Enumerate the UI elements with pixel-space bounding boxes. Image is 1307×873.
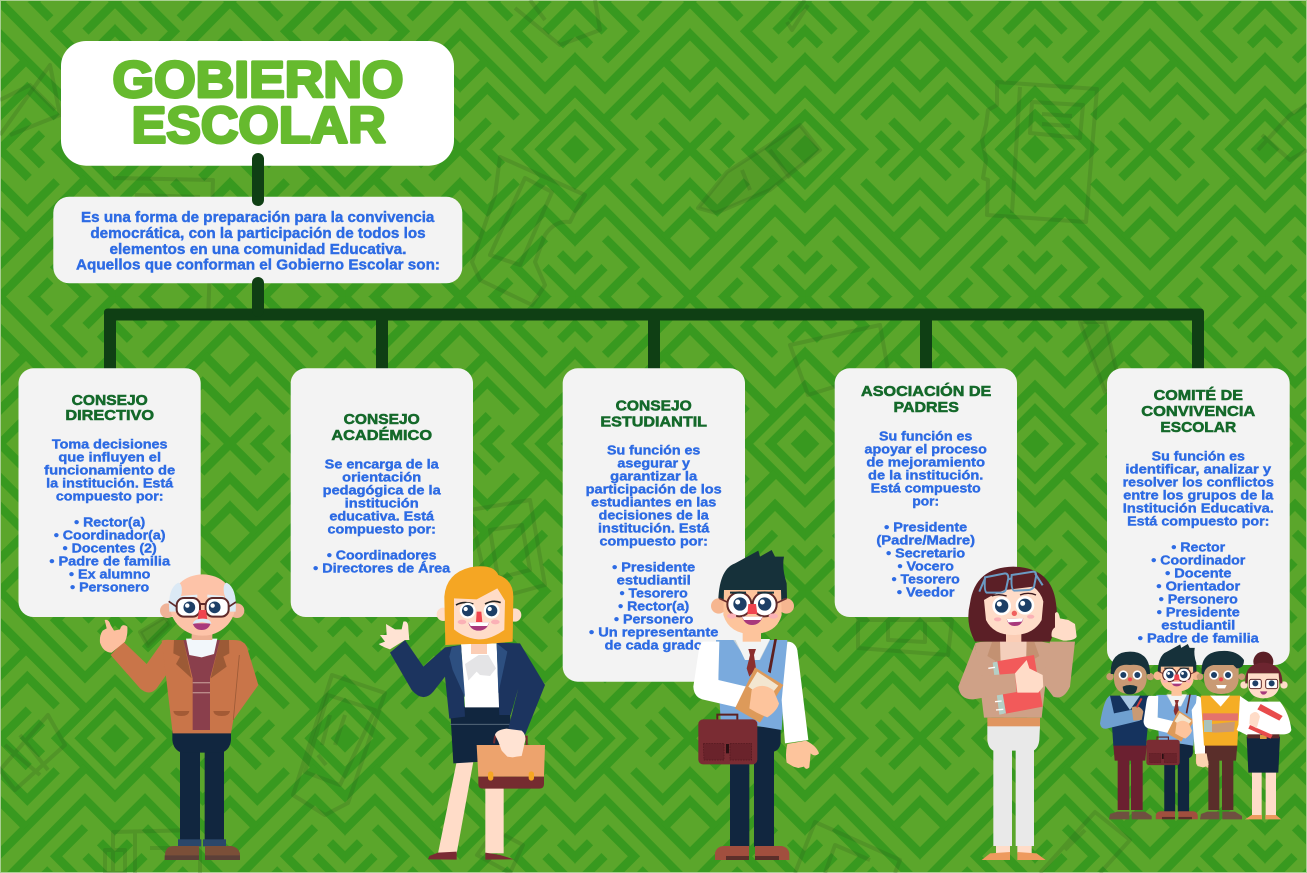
text: comite de convivencia escolar: Su función es: [1152, 449, 1245, 464]
text: consejo directivo: la institución. Está: [46, 476, 174, 491]
text: consejo directivo: • Personero: [70, 580, 149, 595]
text: consejo academico: [313, 457, 451, 576]
text: consejo directivo: Toma decisiones: [52, 437, 168, 452]
text: consejo directivo: • Rector(a): [74, 515, 145, 530]
person: man with beard: [1100, 652, 1154, 819]
text: consejo directivo: funcionamiento de: [44, 463, 175, 478]
text: consejo estudiantil: asegurar y: [617, 456, 691, 471]
text: consejo estudiantil: garantizar la: [610, 469, 698, 484]
text: consejo directivo: que influyen el: [58, 450, 161, 465]
intro text: Aquellos que conforman el Gobierno Escolar son:: [76, 257, 440, 273]
text: consejo estudiantil: de cada grado: [605, 638, 703, 653]
heading: comite de convivencia escolar: COMITÉ DE: [1154, 387, 1243, 404]
text: consejo estudiantil: • Presidente: [612, 560, 695, 575]
text: consejo academico: educativa. Está: [329, 509, 435, 524]
intro text: democrática, con la participación de todos los: [90, 226, 426, 242]
text: comite de convivencia escolar: Institución Educativa.: [1123, 501, 1274, 516]
text: asociacion de padres: por:: [912, 494, 939, 508]
intro box: [53, 197, 462, 283]
panel: asociacion de padres: [835, 368, 1017, 617]
text: consejo estudiantil: institución. Está: [598, 521, 710, 536]
text: asociacion de padres: • Secretario: [886, 546, 965, 561]
text: consejo directivo: compuesto por:: [56, 488, 164, 504]
connector: title to intro: [252, 153, 264, 206]
text: comite de convivencia escolar: identificar, analizar y: [1125, 462, 1272, 477]
heading: comite de convivencia escolar: [1141, 387, 1256, 436]
text: comite de convivencia escolar: • Personero: [1159, 592, 1238, 607]
connector bar: [104, 308, 1204, 375]
text: consejo directivo: • Coordinador(a): [54, 528, 166, 543]
text: consejo directivo: [44, 437, 175, 595]
text: consejo academico: Se encarga de la: [325, 457, 439, 472]
text: consejo academico: orientación: [342, 470, 421, 485]
panel: consejo directivo: [18, 368, 201, 617]
text: comite de convivencia escolar: Está compuesto por:: [1127, 514, 1269, 528]
text: consejo estudiantil: Su función es: [607, 443, 700, 458]
title: GOBIERNO: [112, 51, 404, 108]
text: consejo estudiantil: • Personero: [614, 612, 693, 627]
text: consejo estudiantil: compuesto por:: [600, 534, 708, 548]
text: consejo directivo: • Padre de familia: [49, 554, 171, 569]
text: consejo academico: • Directores de Área: [313, 561, 451, 576]
title box: [61, 41, 454, 166]
panel: consejo estudiantil: [563, 368, 745, 682]
person: student small: [1144, 644, 1215, 819]
text: consejo estudiantil: estudiantil: [617, 573, 691, 588]
character: mother with book: [958, 567, 1077, 860]
heading: consejo academico: CONSEJO: [344, 412, 420, 428]
text: comite de convivencia escolar: • Orientador: [1156, 579, 1240, 594]
text: comite de convivencia escolar: • Padre de familia: [1138, 631, 1260, 646]
text: asociacion de padres: • Vocero: [898, 559, 954, 574]
heading: asociacion de padres: ASOCIACIÓN DE: [861, 382, 992, 400]
text: consejo estudiantil: • Rector(a): [618, 599, 689, 614]
text: comite de convivencia escolar: [1123, 449, 1274, 646]
text: comite de convivencia escolar: resolver los conflictos: [1123, 475, 1274, 490]
character: older man: [100, 574, 258, 860]
heading: consejo academico: ACADÉMICO: [331, 427, 432, 444]
intro text: [76, 210, 440, 273]
text: consejo estudiantil: participación de los: [586, 482, 722, 497]
title: [112, 51, 404, 154]
heading: asociacion de padres: PADRES: [894, 400, 959, 416]
text: consejo directivo: • Docentes (2): [63, 541, 157, 556]
text: asociacion de padres: • Presidente: [884, 520, 967, 535]
text: asociacion de padres: apoyar el proceso: [865, 442, 987, 457]
text: consejo estudiantil: • Un representante: [589, 625, 718, 640]
person: man in orange sweater: [1192, 651, 1248, 819]
text: comite de convivencia escolar: estudiantil: [1161, 618, 1235, 633]
panel: comite de convivencia escolar: [1107, 368, 1290, 665]
intro text: elementos en una comunidad Educativa.: [110, 242, 406, 258]
text: asociacion de padres: • Veedor: [897, 585, 955, 600]
text: asociacion de padres: Su función es: [879, 429, 972, 444]
text: consejo estudiantil: • Tesorero: [620, 586, 688, 601]
heading: consejo directivo: DIRECTIVO: [65, 408, 154, 424]
heading: consejo academico: [331, 412, 432, 444]
text: asociacion de padres: [865, 429, 987, 600]
heading: consejo directivo: [65, 393, 154, 424]
heading: consejo directivo: CONSEJO: [72, 393, 148, 409]
title: ESCOLAR: [132, 97, 386, 154]
text: consejo estudiantil: [586, 443, 722, 653]
text: consejo estudiantil: decisiones de la: [599, 508, 709, 523]
text: asociacion de padres: Está compuesto: [871, 481, 981, 496]
intro text: Es una forma de preparación para la convivencia: [81, 210, 435, 226]
heading: asociacion de padres: [861, 382, 992, 416]
heading: comite de convivencia escolar: CONVIVENCIA: [1141, 404, 1256, 420]
text: consejo directivo: • Ex alumno: [69, 567, 150, 582]
text: asociacion de padres: de la institución.: [868, 468, 983, 483]
text: asociacion de padres: • Tesorero: [892, 572, 960, 587]
person: woman with math book: [1237, 652, 1291, 819]
text: comite de convivencia escolar: • Presidente: [1157, 605, 1240, 620]
text: consejo estudiantil: estudiantes en las: [591, 495, 716, 510]
heading: consejo estudiantil: ESTUDIANTIL: [600, 415, 707, 431]
heading: consejo estudiantil: [600, 399, 707, 431]
character group: comite: [1100, 644, 1291, 819]
connector: intro to bar: [252, 277, 264, 317]
heading: comite de convivencia escolar: ESCOLAR: [1160, 420, 1237, 436]
text: consejo academico: pedagógica de la: [323, 483, 441, 498]
text: consejo academico: institución: [345, 496, 419, 511]
text: consejo academico: compuesto por:: [328, 522, 436, 536]
character: teacher woman: [379, 566, 545, 860]
text: comite de convivencia escolar: • Rector: [1171, 540, 1225, 555]
character: student: [693, 550, 819, 860]
text: comite de convivencia escolar: • Docente: [1165, 566, 1231, 581]
text: asociacion de padres: (Padre/Madre): [876, 533, 975, 548]
heading: consejo estudiantil: CONSEJO: [616, 399, 692, 415]
text: comite de convivencia escolar: • Coordinador: [1151, 553, 1245, 568]
text: asociacion de padres: de mejoramiento: [866, 455, 985, 470]
text: consejo academico: • Coordinadores: [327, 548, 437, 563]
panel: consejo academico: [291, 368, 473, 617]
text: comite de convivencia escolar: entre los grupos de la: [1123, 488, 1274, 503]
